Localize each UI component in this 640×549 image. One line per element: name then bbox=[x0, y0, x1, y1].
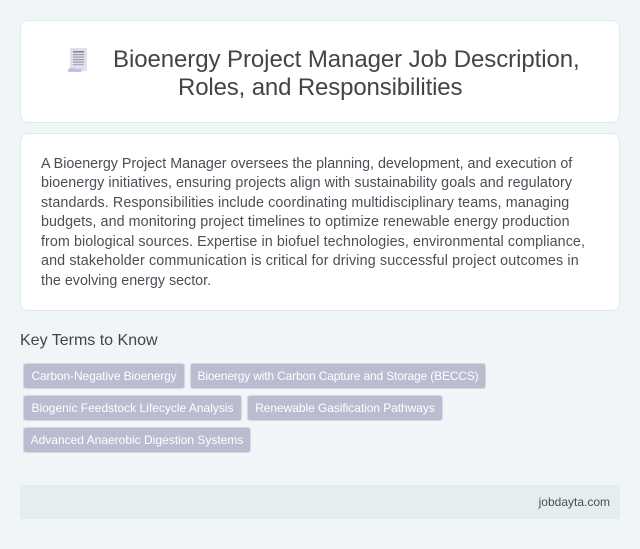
text block: description: budgets, and monitoring project timelines to optimize renewable energy production bbox=[41, 214, 570, 230]
tag: anaerobic digestion: Advanced Anaerobic Digestion Systems bbox=[31, 433, 243, 447]
heading: title: Roles, and Responsibilities bbox=[178, 74, 462, 101]
icon: document scroll bbox=[68, 48, 87, 72]
tag group: key terms bbox=[23, 363, 486, 453]
text block: description: bioenergy initiatives, ensuring projects align with sustainability goals and regulatory bbox=[41, 175, 572, 191]
panel: description bbox=[20, 133, 620, 311]
panel: header bbox=[20, 20, 620, 123]
text block: description: from biological sources. Expertise in biofuel technologies, environmental compliance, bbox=[41, 234, 585, 250]
tag: renewable gasification bbox=[247, 395, 443, 421]
text block: description: standards. Responsibilities include coordinating multidisciplinary teams, managing bbox=[41, 195, 569, 211]
text block: description: and stakeholder communication is critical for driving successful project outcomes in bbox=[41, 253, 579, 269]
tag: biogenic feedstock: Biogenic Feedstock Lifecycle Analysis bbox=[31, 401, 234, 415]
tag: anaerobic digestion bbox=[23, 427, 251, 453]
heading: title: Bioenergy Project Manager Job Description, bbox=[113, 46, 580, 73]
tag: renewable gasification: Renewable Gasification Pathways bbox=[255, 401, 435, 415]
footer text: jobdayta.com bbox=[539, 495, 610, 509]
heading: key terms: Key Terms to Know bbox=[20, 332, 158, 349]
tag: carbon-negative bioenergy bbox=[23, 363, 185, 389]
heading: title bbox=[113, 46, 580, 101]
tag: carbon-negative bioenergy: Carbon-Negative Bioenergy bbox=[31, 369, 177, 383]
tag: biogenic feedstock bbox=[23, 395, 242, 421]
tag: BECCS bbox=[190, 363, 486, 389]
text block: description: the evolving energy sector. bbox=[41, 273, 211, 289]
text block: description bbox=[41, 156, 585, 289]
tag: BECCS: Bioenergy with Carbon Capture and Storage (BECCS) bbox=[198, 369, 478, 383]
text block: description: A Bioenergy Project Manager oversees the planning, development, and execution of bbox=[41, 156, 572, 172]
footer bar bbox=[20, 485, 620, 519]
